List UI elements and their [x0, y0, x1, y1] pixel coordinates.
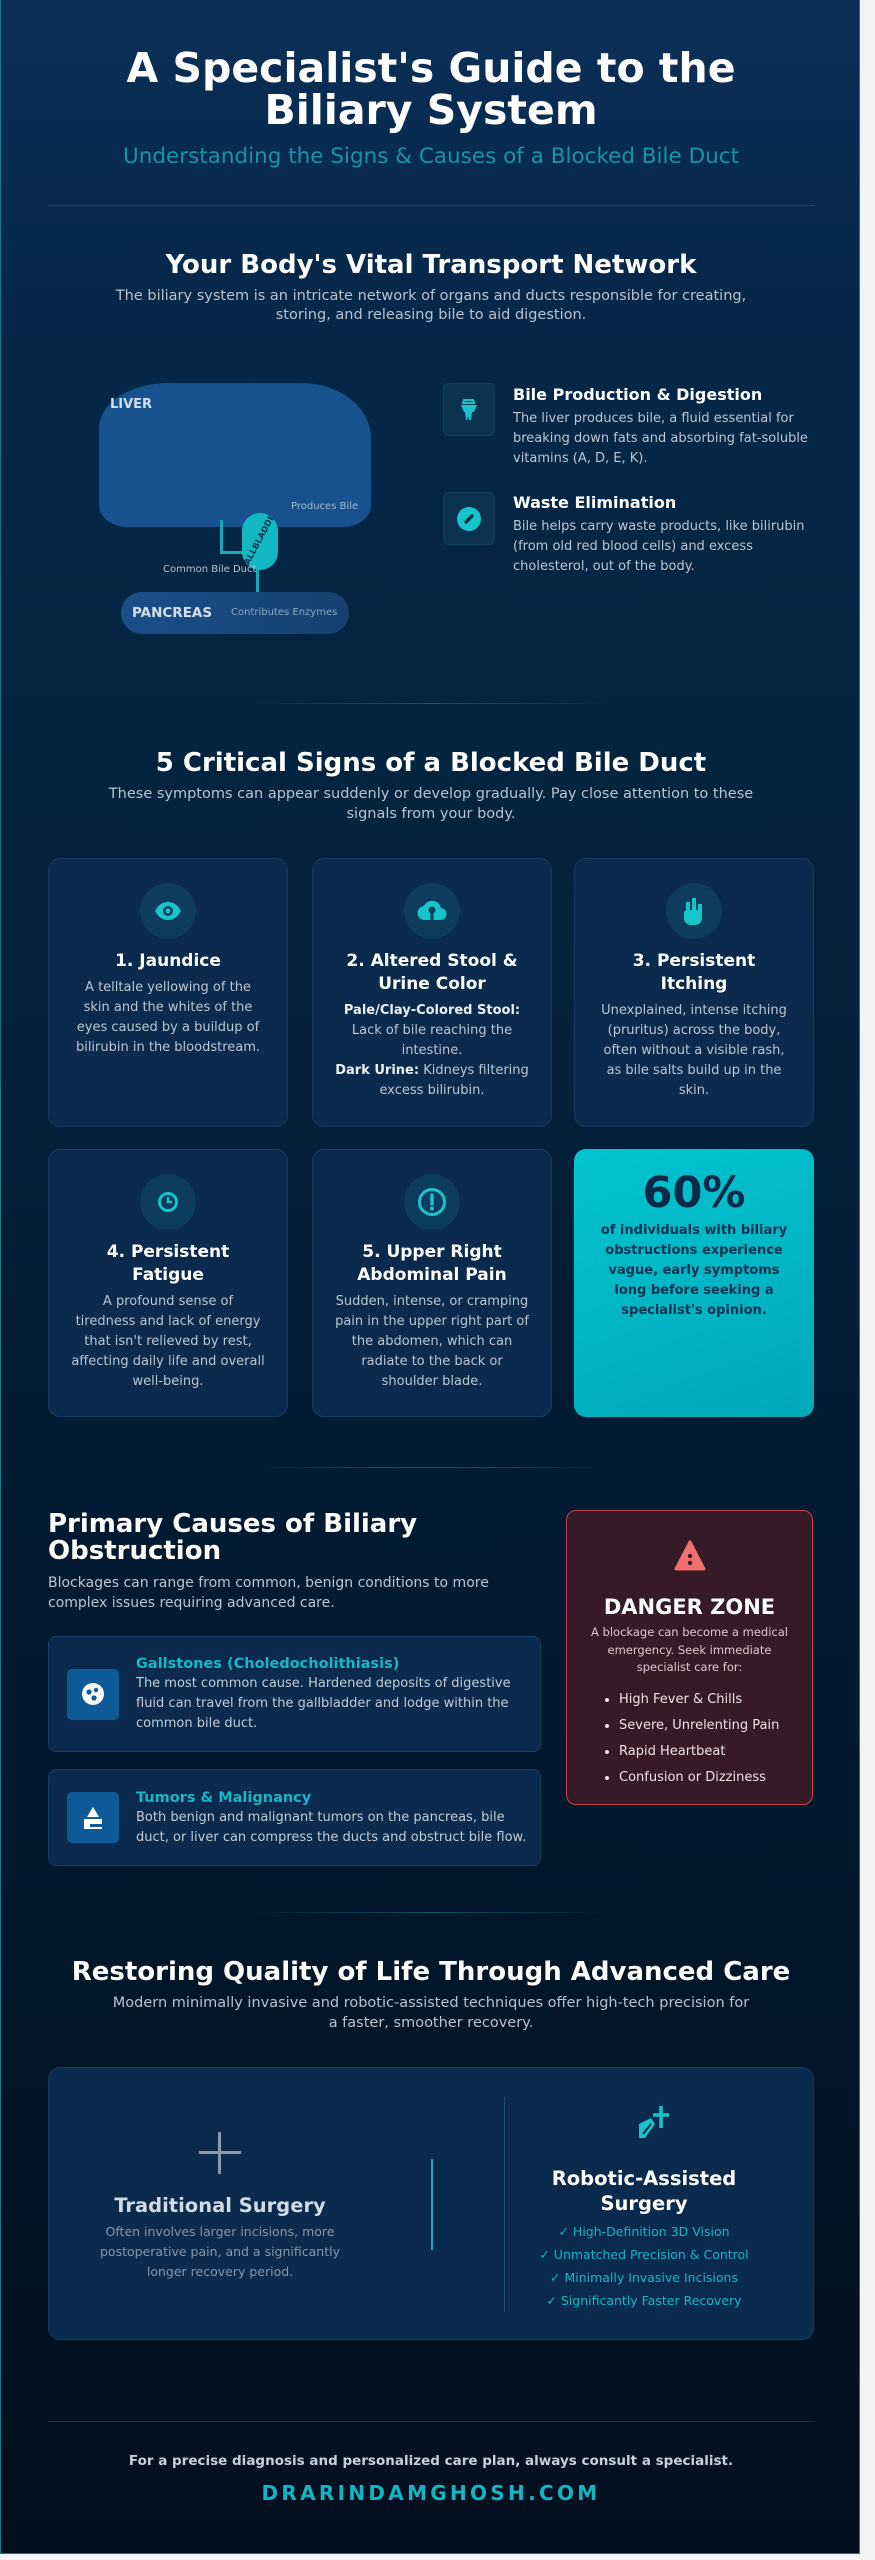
- text: traditional surgery: [100, 2194, 340, 2279]
- panel: danger zone: Confusion or Dizziness: [619, 1770, 766, 1784]
- organ: pancreas: Contributes Enzymes: [231, 607, 337, 618]
- organ: liver: [99, 383, 371, 527]
- stat card: 60%: [574, 1149, 814, 1417]
- text: robotic surgery: ✓ Unmatched Precision & Control: [539, 2247, 749, 2262]
- panel: surgery comparison: [48, 2067, 814, 2340]
- footer text: For a precise diagnosis and personalized care plan, always consult a specialist.: [129, 2453, 733, 2469]
- icon: hand: [666, 883, 722, 939]
- card: itching: [574, 858, 814, 1127]
- text: bile production: Bile Production & Digestion: [513, 385, 762, 404]
- panel: danger zone: Rapid Heartbeat: [619, 1744, 725, 1758]
- text: robotic surgery: ✓ High-Definition 3D Vision: [558, 2224, 730, 2239]
- panel: danger zone: [566, 1510, 813, 1805]
- text: robotic surgery: ✓ Significantly Faster Recovery: [546, 2293, 742, 2308]
- icon: alert: [404, 1174, 460, 1230]
- card: itching: 3. Persistent Itching: [633, 951, 755, 994]
- organ: pancreas: PANCREAS: [132, 605, 212, 621]
- card: abdominal pain: 5. Upper Right Abdominal Pain: [357, 1242, 507, 1285]
- card: jaundice: A telltale yellowing of the skin and the whites of the eyes caused by a buildup of bilirubin in the bloodstream.: [76, 980, 260, 1055]
- card: jaundice: 1. Jaundice: [115, 951, 221, 971]
- card: gallstones: Gallstones (Choledocholithiasis): [136, 1656, 399, 1672]
- card: tumors: Tumors & Malignancy: [136, 1790, 311, 1806]
- card: fatigue: A profound sense of tiredness and lack of energy that isn't relieved by rest, affecting daily life and overall well-being.: [71, 1294, 265, 1389]
- text: traditional surgery: Often involves larger incisions, more postoperative pain, and a significantly longer recovery period.: [100, 2224, 340, 2279]
- text: causes intro: Blockages can range from common, benign conditions to more complex issues requiring advanced care.: [48, 1575, 489, 1611]
- text: waste elimination: [513, 493, 805, 574]
- duct lines: [220, 520, 223, 554]
- card: stool and urine: Pale/Clay-Colored Stool: Lack of bile reaching the intestine.: [344, 1003, 520, 1058]
- organ: pancreas: [121, 592, 349, 634]
- heading: causes: Primary Causes of Biliary Obstruction: [48, 1509, 417, 1566]
- text: bile production: The liver produces bile, a fluid essential for breaking down fats and absorbing fat-soluble vitamins (A, D, E, K).: [513, 411, 808, 466]
- text: bile production: [512, 385, 808, 466]
- text: robotic surgery: [539, 2167, 749, 2308]
- card: gallstones: [48, 1636, 541, 1752]
- panel: danger zone: Severe, Unrelenting Pain: [619, 1718, 779, 1732]
- text: waste elimination: Bile helps carry waste products, like bilirubin (from old red blood cells) and excess cholesterol, out of the body.: [513, 519, 805, 574]
- text: waste elimination: Waste Elimination: [513, 493, 676, 512]
- card: jaundice: [48, 858, 288, 1127]
- text: traditional surgery: Traditional Surgery: [114, 2194, 326, 2217]
- diagram: biliary system: [99, 383, 371, 634]
- icon: cloud: [404, 883, 460, 939]
- icon: waste: [443, 492, 495, 545]
- stat card: 60%: 60%: [643, 1168, 745, 1218]
- card: tumors: Both benign and malignant tumors on the pancreas, bile duct, or liver can compress the ducts and obstruct bile flow.: [136, 1810, 526, 1844]
- footer website: DRARINDAMGHOSH.COM: [262, 2481, 600, 2505]
- card: itching: Unexplained, intense itching (pruritus) across the body, often without a visible rash, as bile salts build up in the skin.: [601, 1003, 787, 1098]
- title: Biliary System: [264, 86, 598, 134]
- card: fatigue: [48, 1149, 288, 1417]
- icon: robotic arm: [639, 2106, 669, 2138]
- card: stool and urine: 2. Altered Stool & Urine Color: [346, 951, 518, 994]
- arrow: divider: [431, 2159, 433, 2250]
- icon: warning: [674, 1540, 706, 1570]
- card: fatigue: 4. Persistent Fatigue: [107, 1242, 229, 1285]
- card: stool and urine: Dark Urine: Kidneys filtering excess bilirubin.: [335, 1063, 529, 1098]
- text: network intro: The biliary system is an intricate network of organs and ducts responsible for creating, storing, and releasing bile to aid digestion.: [116, 288, 746, 323]
- icon: gallstones: [67, 1668, 119, 1720]
- card: gallstones: The most common cause. Hardened deposits of digestive fluid can travel from the gallbladder and lodge within the common bile duct.: [136, 1676, 511, 1731]
- card: abdominal pain: [312, 1149, 552, 1417]
- label: common bile duct: Common Bile Duct: [163, 564, 256, 575]
- icon: tumor: [67, 1792, 119, 1843]
- text: care intro: Modern minimally invasive and robotic-assisted techniques offer high-tech precision for a faster, smoother recovery.: [113, 1995, 749, 2031]
- text: signs intro: These symptoms can appear suddenly or develop gradually. Pay close attention to these signals from your body.: [109, 786, 753, 822]
- heading: transport network: Your Body's Vital Transport Network: [166, 250, 696, 280]
- text: robotic surgery: Robotic-Assisted Surgery: [552, 2167, 736, 2215]
- panel: danger zone: A blockage can become a medical emergency. Seek immediate specialist care for:: [591, 1625, 788, 1674]
- heading: 5 signs: 5 Critical Signs of a Blocked Bile Duct: [156, 748, 706, 778]
- organ: liver: Produces Bile: [291, 501, 358, 512]
- panel: danger zone: High Fever & Chills: [619, 1692, 742, 1706]
- text: robotic surgery: ✓ Minimally Invasive Incisions: [550, 2270, 738, 2285]
- card: tumors: [48, 1769, 541, 1866]
- stat card: 60%: of individuals with biliary obstructions experience vague, early symptoms long before seeking a specialist's opinion.: [601, 1223, 787, 1318]
- title: [126, 44, 736, 134]
- icon: bile production: [443, 383, 495, 436]
- card: stool and urine: [312, 858, 552, 1127]
- card: abdominal pain: Sudden, intense, or cramping pain in the upper right part of the abdomen, which can radiate to the back or shoulder blade.: [335, 1294, 529, 1389]
- title: A Specialist's Guide to the: [126, 44, 736, 92]
- icon: plus: [199, 2132, 241, 2174]
- subtitle: Understanding the Signs & Causes of a Blocked Bile Duct: [123, 144, 739, 169]
- organ: liver: LIVER: [110, 397, 152, 412]
- icon: clock: [140, 1174, 196, 1230]
- icon: eye: [140, 883, 196, 939]
- heading: advanced care: Restoring Quality of Life Through Advanced Care: [72, 1957, 790, 1987]
- panel: danger zone: DANGER ZONE: [604, 1595, 775, 1619]
